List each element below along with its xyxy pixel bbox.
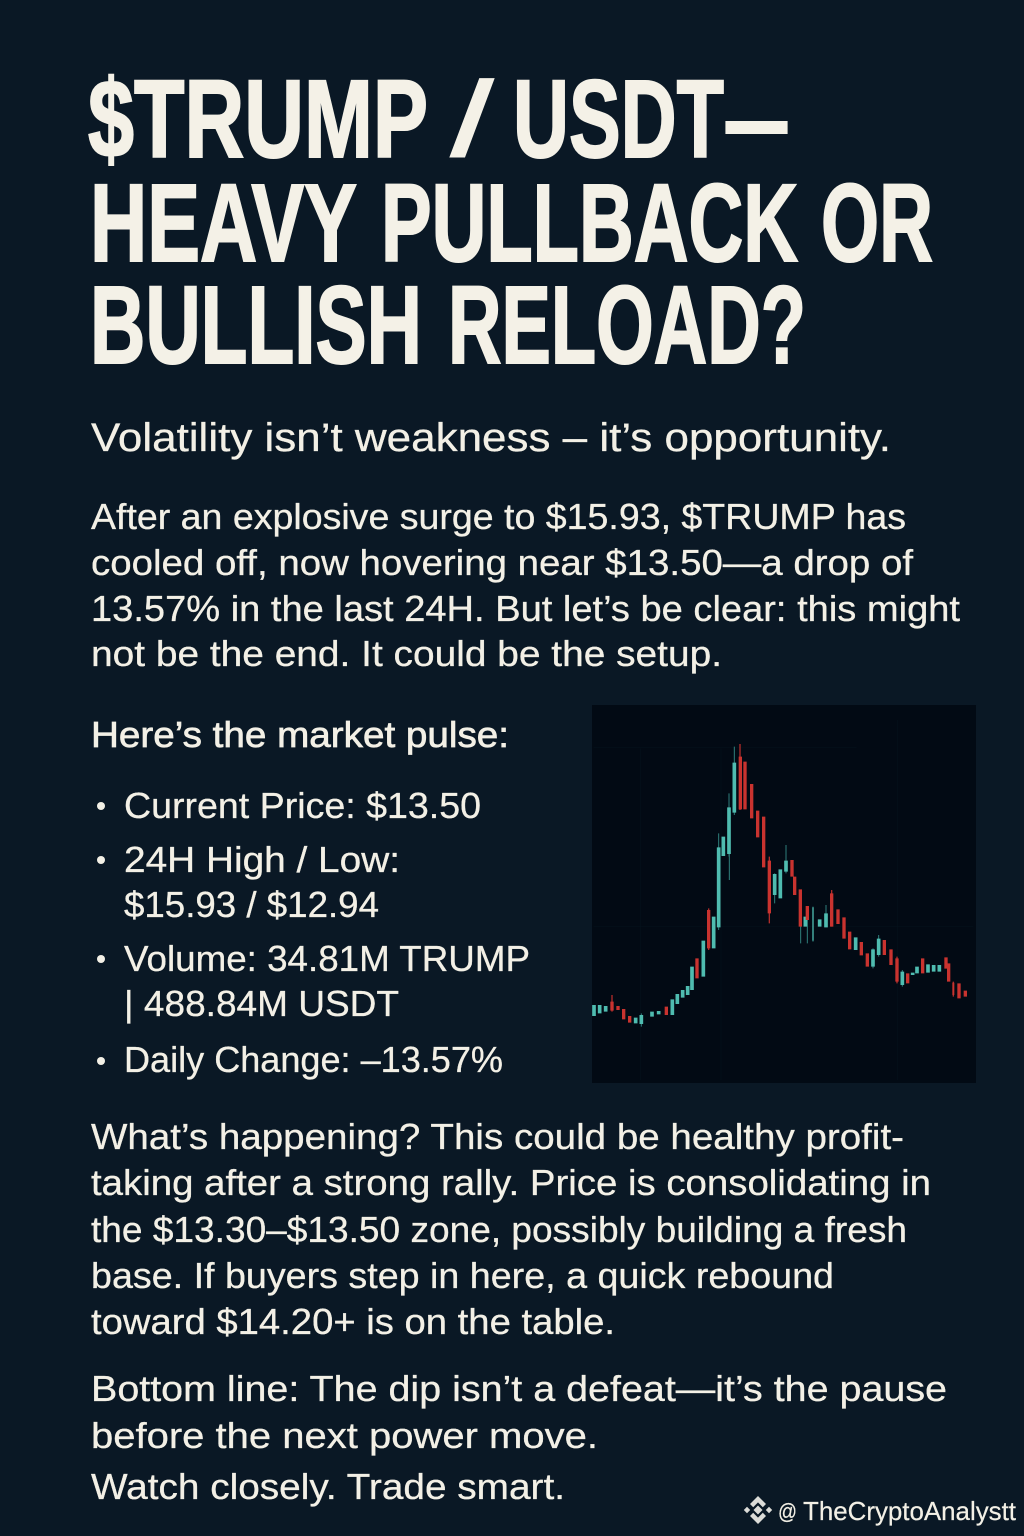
title: RELOAD? [448,264,806,387]
what's happening paragraph: taking after a strong rally. Price is consolidating in [91,1162,931,1203]
bullet: volume: | 488.84M USDT [124,983,399,1024]
bullet: volume: Volume: 34.81M TRUMP [124,938,530,979]
market pulse list [97,785,530,1080]
title: OR [821,162,933,285]
title: $TRUMP [88,58,428,181]
icon: diamond logo [744,1496,772,1524]
intro paragraph: cooled off, now hovering near $13.50—a drop of [91,542,914,583]
title: / [452,62,492,178]
bullet: 24H high and low [97,839,400,925]
bullet: 24H high and low: 24H High / Low: [124,839,400,880]
bullet: 24H high and low: $15.93 / $12.94 [124,884,379,925]
title: BULLISH [90,264,422,387]
intro paragraph: not be the end. It could be the setup. [91,633,722,674]
bottom line paragraph [91,1368,947,1507]
title: USDT [513,58,724,181]
what's happening paragraph: toward $14.20+ is on the table. [91,1301,615,1342]
bullet: current price: Current Price: $13.50 [124,785,481,826]
bottom line paragraph: Bottom line: The dip isn’t a defeat—it’s the pause [91,1368,947,1409]
bullet: volume [97,938,530,1024]
bullet: daily change: Daily Change: –13.57% [124,1039,503,1080]
what's happening paragraph: What’s happening? This could be healthy profit- [91,1116,904,1157]
title: HEAVY [90,162,357,285]
intro paragraph: 13.57% in the last 24H. But let’s be clear: this might [91,588,960,629]
subtitle: Volatility isn’t weakness – it’s opportunity. [91,416,891,460]
handle text: TheCryptoAnalystt [803,1496,1017,1526]
title: PULLBACK [381,162,798,285]
what's happening paragraph: base. If buyers step in here, a quick rebound [91,1255,834,1296]
title [88,58,933,387]
intro paragraph [91,496,960,674]
handle text: @ [778,1499,797,1524]
market pulse heading: Here’s the market pulse: [91,714,509,755]
intro paragraph: After an explosive surge to $15.93, $TRUMP has [91,496,906,537]
what's happening paragraph: the $13.30–$13.50 zone, possibly building a fresh [91,1209,907,1250]
candlestick chart [592,705,976,1083]
watermark [744,1496,1017,1526]
title: — [726,58,787,181]
what's happening paragraph [91,1116,931,1342]
bottom line paragraph: Watch closely. Trade smart. [91,1466,565,1507]
bottom line paragraph: before the next power move. [91,1415,598,1456]
